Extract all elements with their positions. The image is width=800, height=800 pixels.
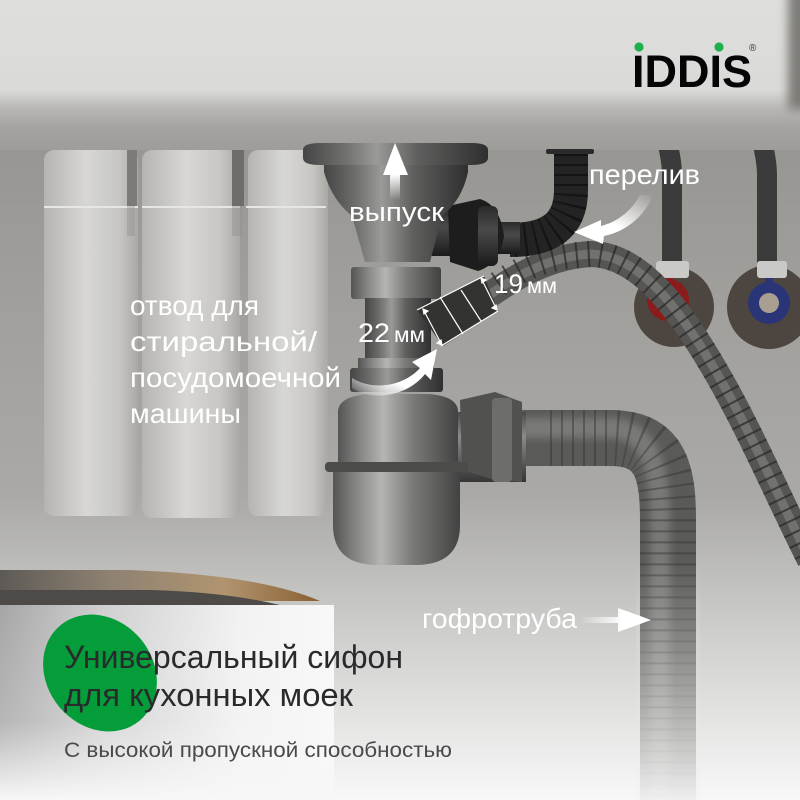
label: 19 mm (494, 269, 557, 299)
shadow under wood (0, 590, 280, 605)
bottle upper (338, 394, 458, 462)
lower nut (350, 358, 443, 392)
siphon body (303, 143, 526, 565)
title (64, 639, 403, 713)
label: washing machine branch: машины (130, 398, 241, 429)
title: для кухонных моек (64, 677, 354, 713)
funnel (324, 165, 468, 262)
logo: IDDIS (632, 46, 752, 97)
dimension lines (417, 276, 498, 346)
vertical tube (365, 298, 431, 362)
sink underside (0, 0, 800, 150)
arrow: outlet up (383, 143, 408, 200)
bottle cup (333, 472, 460, 565)
label: overflow: перелив (589, 159, 700, 190)
flange (303, 143, 488, 165)
branch fitting (417, 276, 498, 346)
label: 22 mm: 22 (358, 318, 390, 348)
sink right edge shadow (788, 0, 800, 110)
arrow: branch (352, 349, 437, 396)
overflow pipe (430, 149, 594, 271)
label: washing machine branch: отвод для (130, 290, 259, 321)
label: corrugated pipe: гофротруба (422, 603, 577, 634)
green blob (20, 591, 180, 755)
angle valves and hoses (634, 130, 800, 349)
drain pipe outlet nut (456, 392, 526, 482)
water filter cartridges (44, 150, 328, 518)
label: 19 mm: 19 (494, 269, 523, 299)
ring (325, 462, 468, 472)
label: washing machine branch: посудомоечной (130, 362, 341, 393)
corrugated drain pipe (520, 428, 668, 800)
title: Универсальный сифон (64, 639, 403, 675)
label: 22 mm (358, 318, 425, 348)
fade of drain pipe at bottom (636, 560, 700, 800)
upper nut (351, 267, 441, 299)
label: 22 mm: мм (394, 324, 425, 347)
label: outlet: выпуск (349, 197, 444, 227)
label: washing machine branch: стиральной/ (130, 326, 317, 357)
arrow: corrugated pipe (580, 608, 651, 632)
white cylinder (0, 605, 334, 800)
label: 19 mm: мм (527, 275, 557, 298)
worktop wood edge (0, 570, 320, 601)
label: washing machine branch (130, 290, 341, 429)
corrugated hose to dishwasher (440, 254, 800, 560)
subtitle: С высокой пропускной способностью (64, 739, 452, 762)
logo: ® (749, 43, 757, 54)
arrow: overflow (574, 195, 653, 244)
